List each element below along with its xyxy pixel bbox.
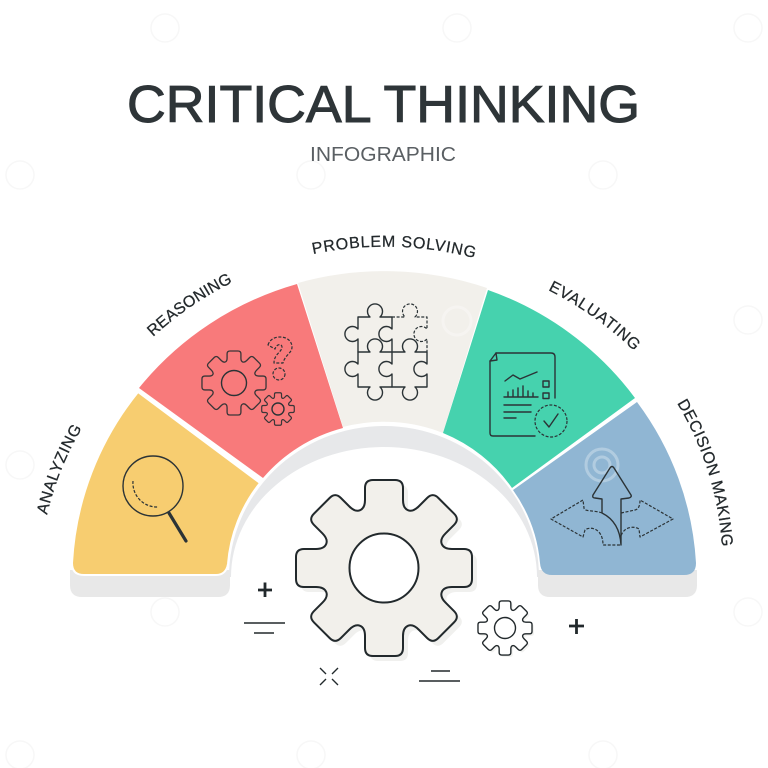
icon: three-way arrows bbox=[551, 466, 673, 545]
icon: gears and question mark bbox=[202, 337, 294, 425]
icon: report with check bbox=[490, 353, 567, 437]
panel: decision making bbox=[513, 398, 733, 575]
label: decision making: DECISION MAKING bbox=[678, 398, 733, 546]
decoration: cross marks bbox=[320, 668, 338, 685]
segment: blue bbox=[513, 402, 696, 575]
panel: reasoning bbox=[139, 274, 343, 478]
panel: problem solving bbox=[298, 236, 487, 433]
segment: cream bbox=[298, 271, 487, 433]
label: problem solving: PROBLEM SOLVING bbox=[312, 236, 476, 258]
panel: evaluating bbox=[443, 280, 640, 488]
panel: analyzing bbox=[37, 393, 259, 576]
decoration: plus right bbox=[569, 619, 584, 634]
label: evaluating: EVALUATING bbox=[549, 280, 640, 350]
label: analyzing: ANALYZING bbox=[37, 425, 80, 516]
segment: red bbox=[139, 284, 343, 478]
icon: small gear bbox=[478, 601, 534, 657]
segment: green bbox=[443, 290, 635, 488]
semicircle shadow band bbox=[70, 426, 697, 597]
decoration: plus left bbox=[258, 582, 272, 597]
decoration: lines right bbox=[419, 671, 460, 681]
decoration: lines left bbox=[244, 623, 285, 633]
title: CRITICAL THINKING bbox=[127, 76, 640, 134]
icon: puzzle bbox=[345, 304, 427, 400]
subtitle: INFOGRAPHIC bbox=[310, 143, 456, 166]
label: reasoning: REASONING bbox=[146, 274, 231, 336]
icon: magnifying glass bbox=[123, 456, 186, 541]
segment: yellow bbox=[72, 392, 260, 575]
icon: central gear bbox=[296, 480, 477, 661]
